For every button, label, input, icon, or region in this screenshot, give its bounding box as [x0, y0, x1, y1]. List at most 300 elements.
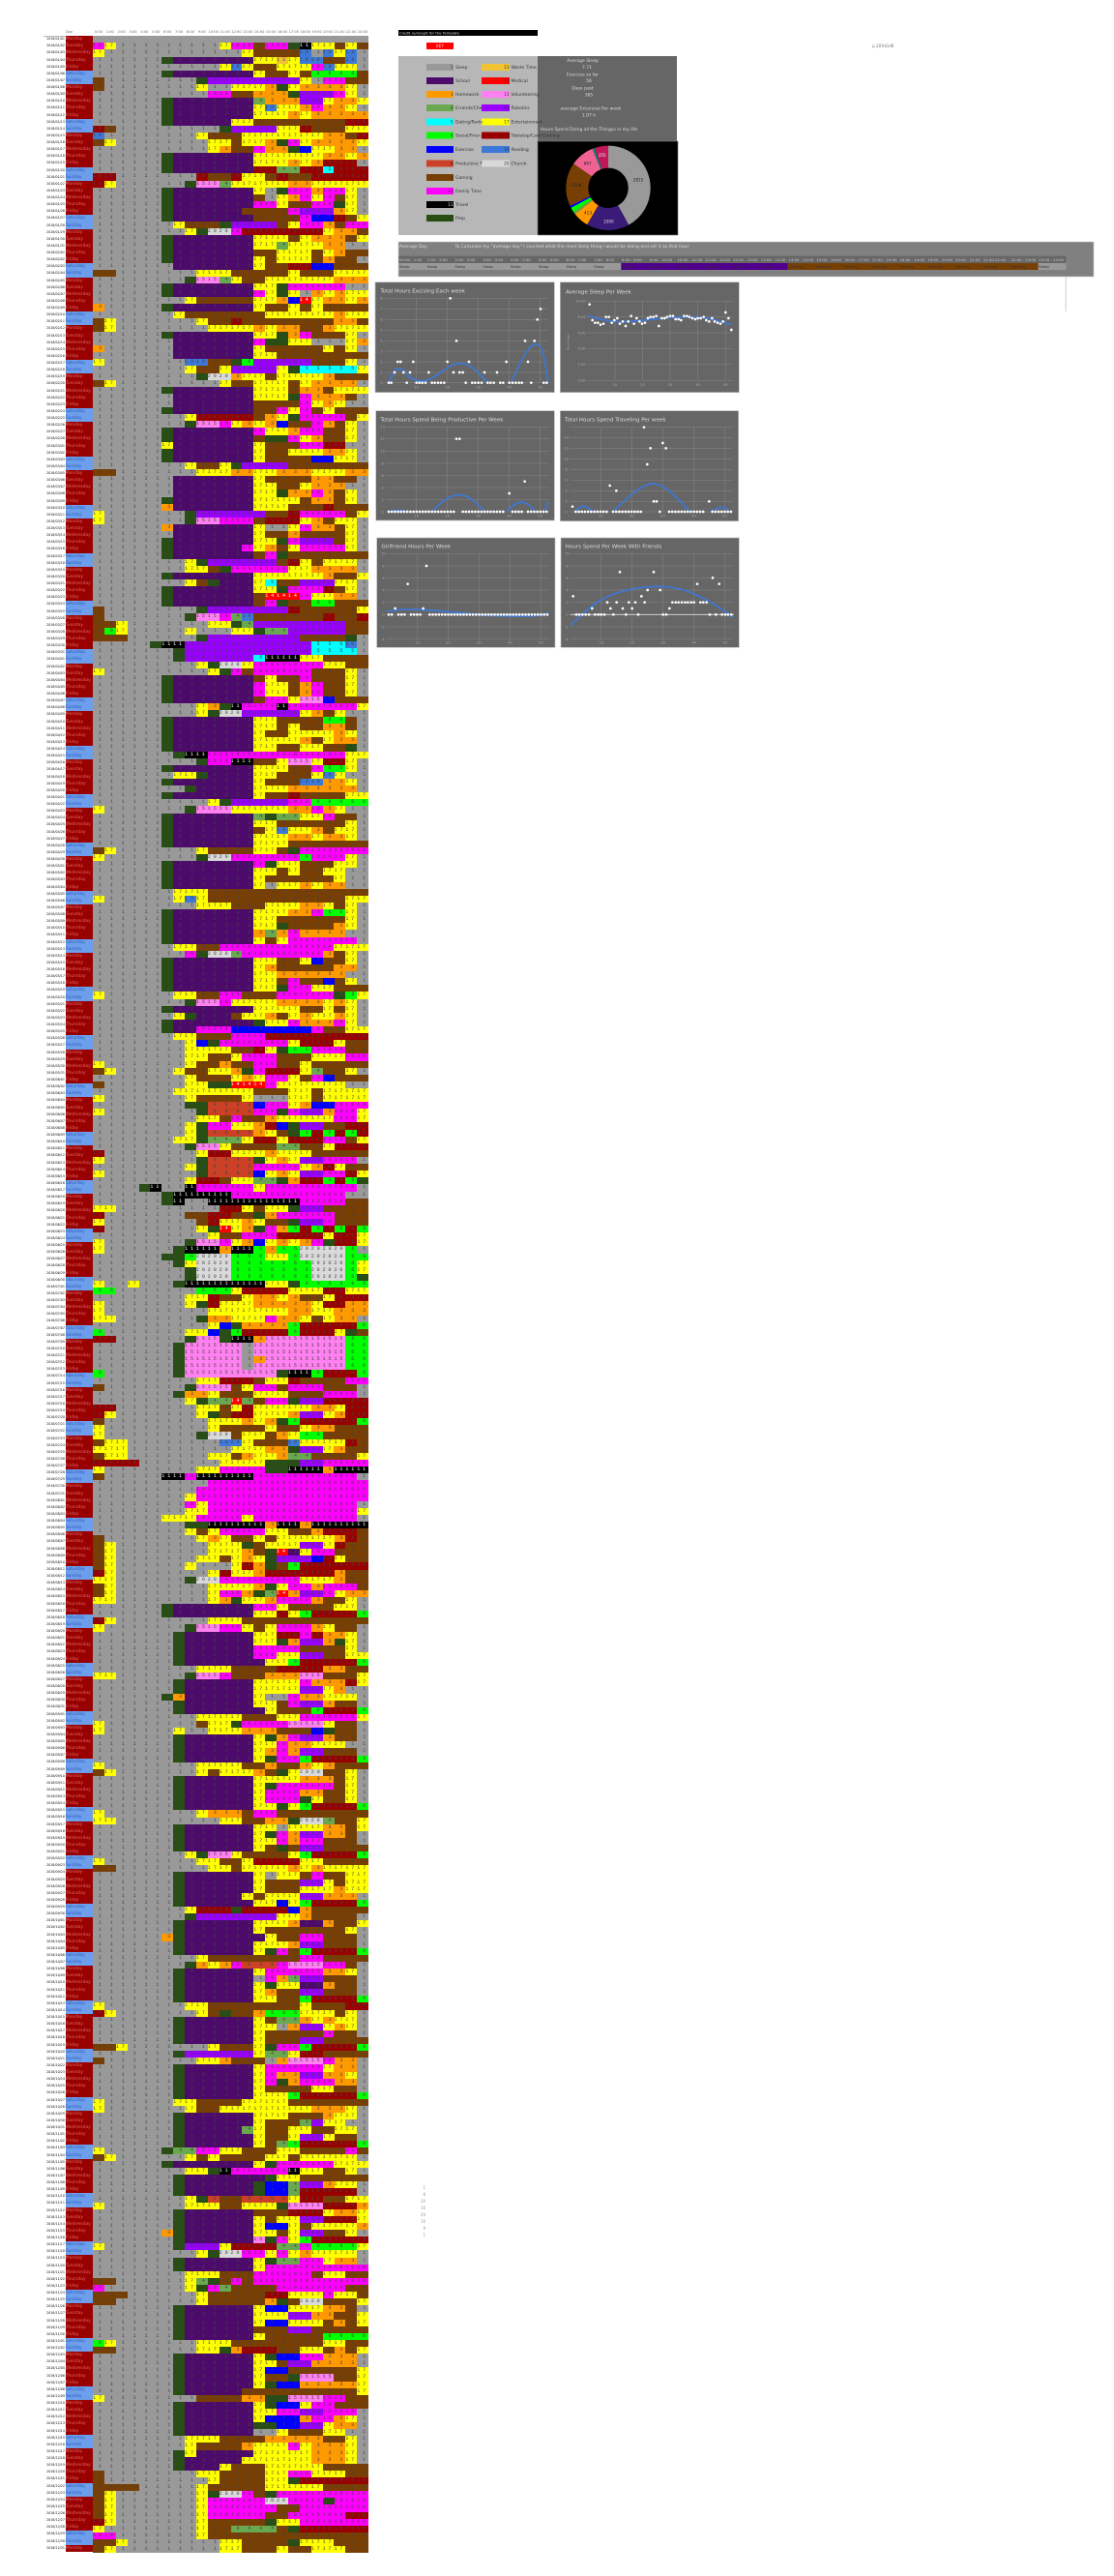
hourly activity grid: 365 days by 24 hours: 9: [282, 2526, 288, 2532]
hourly activity grid: 365 days by 24 hours: 10: [265, 1316, 277, 1321]
hourly activity grid: 365 days by 24 hours: 1 1 1 1 1 1 1: [99, 2320, 173, 2325]
text: 2018/01/31: [46, 244, 65, 248]
hourly activity grid: 365 days by 24 hours: 17: [345, 2443, 357, 2448]
hourly activity grid: 365 days by 24 hours: 1 1 1 1 1 1 1 1: [99, 1164, 185, 1170]
hourly activity grid: 365 days by 24 hours: 17: [231, 1226, 242, 1231]
text: 2018/12/28: [46, 2525, 65, 2529]
hourly activity grid: 365 days by 24 hours: 9: [282, 559, 288, 565]
hourly activity grid: 365 days by 24 hours: 10101010: [300, 1199, 345, 1204]
hourly activity grid: 365 days by 24 hours: 3 3: [351, 469, 368, 475]
hourly activity grid: 365 days by 24 hours: 17: [323, 2134, 335, 2140]
hourly activity grid: 365 days by 24 hours: 1717171717171717: [220, 2106, 311, 2112]
hourly activity grid: 365 days by 24 hours: 7 7 7 7 7 7 7: [236, 1026, 311, 1032]
hourly activity grid: 365 days by 24 hours: 1 1 1 1 1 1 1 1: [122, 1542, 208, 1548]
hourly activity grid: 365 days by 24 hours: 17: [265, 1624, 277, 1630]
text: 2018/10/20: [46, 2050, 65, 2054]
hourly activity grid: 365 days by 24 hours: 7: [259, 1170, 265, 1176]
hourly activity grid: 365 days by 24 hours: 17: [345, 421, 357, 427]
text: 2018/04/20: [46, 788, 65, 792]
legend numbers: 13: [504, 65, 510, 70]
hourly activity grid: 365 days by 24 hours: 17: [253, 875, 265, 881]
hourly activity grid: 365 days by 24 hours: 10101010: [323, 1460, 368, 1466]
hourly activity grid: 365 days by 24 hours: 12: [185, 806, 196, 812]
hourly activity grid: 365 days by 24 hours: 17: [185, 228, 196, 234]
hourly activity grid: 365 days by 24 hours: 1717171717: [277, 1535, 335, 1541]
hourly activity grid: 365 days by 24 hours: 17: [345, 545, 357, 550]
text: 2018/10/03: [46, 1933, 65, 1937]
text: 2018/01/14: [46, 127, 65, 131]
hourly activity grid: 365 days by 24 hours: 10: [265, 600, 277, 606]
hourly activity grid: 365 days by 24 hours: 1 1 1 1 1 1 1 1: [99, 1192, 368, 1198]
hourly activity grid: 365 days by 24 hours: 9: [351, 511, 357, 517]
hourly activity grid: 365 days by 24 hours: 9 9: [351, 1164, 368, 1170]
hourly activity grid: 365 days by 24 hours: 1717: [253, 724, 277, 729]
average day hour labels: 20:00 - 21:00: [955, 257, 981, 262]
hourly activity grid: 365 days by 24 hours: 1 1 1 1 1 1 1 1: [99, 1645, 368, 1651]
hourly activity grid: 365 days by 24 hours: 17: [104, 1411, 116, 1417]
average day activities: Gaming: [955, 264, 970, 269]
hourly activity grid: 365 days by 24 hours: 12: [161, 250, 173, 255]
hourly activity grid: 365 days by 24 hours: 17: [253, 2333, 265, 2339]
hourly activity grid: 365 days by 24 hours: 12: [173, 2457, 185, 2463]
chart: total hours exercising each week: 20: [445, 385, 451, 389]
text: 2018/02/05: [46, 279, 65, 282]
hourly activity grid: 365 days by 24 hours: 2 2 2 2 2 2: [191, 1694, 253, 1700]
hourly activity grid: 365 days by 24 hours: 12: [288, 91, 300, 97]
hourly activity grid: 365 days by 24 hours: 9: [259, 1205, 265, 1211]
text: 2018/06/02: [46, 1084, 65, 1088]
text: 2018/08/05: [46, 1525, 65, 1529]
hourly activity grid: 365 days by 24 hours: 1 1 1 1 1 1 1 1 1: [99, 1501, 368, 1507]
hourly activity grid: 365 days by 24 hours: 9 9 9 9: [214, 847, 253, 853]
hourly activity grid: 365 days by 24 hours: 12: [196, 1851, 208, 1857]
hourly activity grid: 365 days by 24 hours: 2 2 2 2 2 2 2: [179, 875, 253, 881]
text: 2018/09/21: [46, 1850, 65, 1853]
hourly activity grid: 365 days by 24 hours: 151515: [196, 1384, 231, 1390]
hourly activity grid: 365 days by 24 hours: 171717: [300, 1577, 334, 1583]
text: 2018/02/14: [46, 341, 65, 344]
hourly activity grid: 365 days by 24 hours: 10: [345, 2147, 357, 2153]
text: 2018/10/08: [46, 1967, 65, 1970]
hourly activity grid: 365 days by 24 hours: 12: [173, 2360, 185, 2366]
hourly activity grid: 365 days by 24 hours: 18: [93, 1411, 104, 1417]
hourly activity grid: 365 days by 24 hours: 9: [236, 139, 242, 145]
hourly activity grid: 365 days by 24 hours: 12: [265, 1549, 277, 1554]
hourly activity grid: 365 days by 24 hours: 2 2 2 2 2 2: [191, 2367, 253, 2373]
hourly activity grid: 365 days by 24 hours: 10101010101010: [220, 1577, 300, 1583]
chart: average sleep per week: 8.00: [578, 315, 586, 319]
hourly activity grid: 365 days by 24 hours: 9: [351, 2305, 357, 2311]
text: 2018/12/26: [46, 2511, 65, 2515]
hourly activity grid: 365 days by 24 hours: 1 1 1 1 1 1 1: [99, 256, 368, 262]
text: 2018/03/11: [46, 513, 65, 517]
hourly activity grid: 365 days by 24 hours: 12: [173, 1996, 185, 2001]
hourly activity grid: 365 days by 24 hours: 1717: [208, 1865, 231, 1871]
hourly activity grid: 365 days by 24 hours: 18: [345, 1226, 357, 1231]
hourly activity grid: 365 days by 24 hours: 17171717: [311, 2250, 357, 2256]
hourly activity grid: 365 days by 24 hours: 10: [300, 400, 311, 406]
hourly activity grid: 365 days by 24 hours: 1 1 1 1 1 1 1 1: [99, 2258, 368, 2264]
hourly activity grid: 365 days by 24 hours: 1 1 1 1 1 1 1 1 1: [99, 579, 368, 585]
hourly activity grid: 365 days by 24 hours: 17: [357, 2298, 368, 2304]
hourly activity grid: 365 days by 24 hours: 2 2 2 2 2 2 2: [179, 394, 253, 400]
text: 2018/08/30: [46, 1698, 65, 1702]
hourly activity grid: 365 days by 24 hours: 1616161616161616161616: [185, 648, 311, 654]
hourly activity grid: 365 days by 24 hours: 17: [345, 1783, 357, 1789]
hourly activity grid: 365 days by 24 hours: 12: [185, 785, 196, 791]
hourly activity grid: 365 days by 24 hours: 171717: [277, 1150, 311, 1156]
text: 2018/08/13: [46, 1581, 65, 1584]
hourly activity grid: 365 days by 24 hours: 17: [300, 1068, 311, 1074]
hourly activity grid: 365 days by 24 hours: 17: [253, 2072, 265, 2078]
hourly activity grid: 365 days by 24 hours: 9: [99, 2058, 104, 2063]
legend numbers: 10: [448, 189, 454, 193]
hourly activity grid: 365 days by 24 hours: 18: [93, 2519, 104, 2525]
hourly activity grid: 365 days by 24 hours: 6: [306, 854, 311, 860]
hourly activity grid: 365 days by 24 hours: 17: [253, 1886, 265, 1892]
hourly activity grid: 365 days by 24 hours: 1 1 1 1 1 1 1 1: [99, 1982, 368, 1988]
hourly activity grid: 365 days by 24 hours: 12: [161, 882, 173, 888]
hourly activity grid: 365 days by 24 hours: 14: [220, 1226, 231, 1231]
hourly activity grid: 365 days by 24 hours: 161616: [277, 1555, 311, 1561]
hourly activity grid: 365 days by 24 hours: 10: [253, 290, 265, 296]
hourly activity grid: 365 days by 24 hours: 9 9 9: [339, 1219, 368, 1225]
hourly activity grid: 365 days by 24 hours: 171717: [311, 1053, 345, 1059]
hourly activity grid: 365 days by 24 hours: 171717: [253, 1391, 288, 1397]
text: 2018/09/24: [46, 1870, 65, 1874]
hourly activity grid: 365 days by 24 hours: 1 1 1 1 1 1 1: [99, 2230, 368, 2235]
hourly activity grid: 365 days by 24 hours: 3 3 3: [317, 2450, 345, 2456]
hourly activity grid: 365 days by 24 hours: 1010: [323, 1137, 345, 1142]
hourly activity grid: 365 days by 24 hours: 10: [300, 194, 311, 200]
hourly activity grid: 365 days by 24 hours: 3 3: [271, 1446, 288, 1452]
hourly activity grid: 365 days by 24 hours: 9: [317, 559, 323, 565]
hourly activity grid: 365 days by 24 hours: 17: [93, 1170, 104, 1176]
hourly activity grid: 365 days by 24 hours: 1 1 1 1 1 1 1: [133, 635, 368, 640]
hourly activity grid: 365 days by 24 hours: 9: [339, 586, 345, 592]
hourly activity grid: 365 days by 24 hours: 1717: [277, 1913, 300, 1919]
header row of the time grid: 14:00: [254, 30, 264, 34]
hourly activity grid: 365 days by 24 hours: 2020: [300, 1769, 323, 1775]
hourly activity grid: 365 days by 24 hours: 1 1 1 1 1 1 1: [99, 497, 368, 503]
hourly activity grid: 365 days by 24 hours: 17: [311, 882, 323, 888]
hourly activity grid: 365 days by 24 hours: 17: [288, 1075, 300, 1081]
hourly activity grid: 365 days by 24 hours: 10101010: [253, 1645, 300, 1651]
hourly activity grid: 365 days by 24 hours: 9 9: [329, 1796, 345, 1802]
hourly activity grid: 365 days by 24 hours: 1 1 1 1 1 1 1 1: [110, 1150, 196, 1156]
legend numbers: 9: [451, 175, 454, 180]
hourly activity grid: 365 days by 24 hours: 17: [311, 1796, 323, 1802]
hourly activity grid: 365 days by 24 hours: 17: [323, 1006, 334, 1012]
hourly activity grid: 365 days by 24 hours: 12: [173, 1975, 185, 1981]
hourly activity grid: 365 days by 24 hours: 3: [259, 2010, 265, 2016]
hourly activity grid: 365 days by 24 hours: 18: [93, 1150, 104, 1156]
hourly activity grid: 365 days by 24 hours: 3 3 3 3 3 3: [282, 971, 345, 977]
hourly activity grid: 365 days by 24 hours: 1 1 1 1 1 1 1 1: [99, 1013, 368, 1019]
hourly activity grid: 365 days by 24 hours: 3: [248, 1226, 253, 1231]
hourly activity grid: 365 days by 24 hours: 12: [277, 283, 288, 289]
hourly activity grid: 365 days by 24 hours: 1212: [161, 1254, 185, 1259]
hourly activity grid: 365 days by 24 hours: 1616: [300, 2037, 323, 2043]
hourly activity grid: 365 days by 24 hours: 1 1 1 1 1 1 1: [99, 779, 368, 785]
hourly activity grid: 365 days by 24 hours: 10: [300, 215, 311, 221]
hourly activity grid: 365 days by 24 hours: 1 1 1 1 1 1 1: [99, 724, 368, 729]
hourly activity grid: 365 days by 24 hours: 17: [265, 325, 277, 331]
legend numbers: 4: [451, 105, 454, 110]
text: 2018/03/03: [46, 458, 65, 461]
hourly activity grid: 365 days by 24 hours: 3: [282, 1239, 288, 1245]
panel: summary stats: average Excersise Per week: [561, 106, 622, 112]
hourly activity grid: 365 days by 24 hours: 1 1 1 1 1 1 1 1: [99, 1639, 368, 1644]
hourly activity grid: 365 days by 24 hours: 101010101010101010101010: [208, 752, 345, 757]
chart: total hours traveling per week: 10: [564, 458, 570, 461]
hourly activity grid: 365 days by 24 hours: 17: [253, 2367, 265, 2373]
text: 2018/05/30: [46, 1064, 65, 1068]
hourly activity grid: 365 days by 24 hours: 181818181818: [265, 1570, 335, 1576]
hourly activity grid: 365 days by 24 hours: 12: [335, 1639, 345, 1644]
hourly activity grid: 365 days by 24 hours: 1 1 1 1 1 1 1: [99, 1659, 173, 1665]
hourly activity grid: 365 days by 24 hours: 3 3: [339, 2209, 357, 2215]
hourly activity grid: 365 days by 24 hours: 12: [161, 717, 173, 723]
legend labels: Social/Frien: [455, 133, 481, 139]
hourly activity grid: 365 days by 24 hours: 12: [173, 1886, 185, 1892]
hourly activity grid: 365 days by 24 hours: 9 9 9: [225, 2271, 253, 2277]
hourly activity grid: 365 days by 24 hours: 12: [265, 1734, 277, 1740]
hourly activity grid: 365 days by 24 hours: 18181818: [311, 1803, 357, 1809]
hourly activity grid: 365 days by 24 hours: 17: [185, 2278, 196, 2284]
hourly activity grid: 365 days by 24 hours: 17: [345, 208, 357, 214]
date and weekday columns: Saturday Sunday: [66, 1567, 85, 1579]
hourly activity grid: 365 days by 24 hours: 1010: [196, 2147, 220, 2153]
hourly activity grid: 365 days by 24 hours: 1 1 1 1 1 1: [122, 1577, 185, 1583]
hourly activity grid: 365 days by 24 hours: 1 1 1 1 1 1 1 1 1: [122, 43, 220, 48]
text: 2018/03/09: [46, 499, 65, 503]
hourly activity grid: 365 days by 24 hours: 1717: [345, 2196, 368, 2202]
hourly activity grid: 365 days by 24 hours: 9 9: [202, 944, 220, 950]
hourly activity grid: 365 days by 24 hours: 17: [253, 937, 265, 943]
hourly activity grid: 365 days by 24 hours: 3: [271, 964, 277, 970]
hourly activity grid: 365 days by 24 hours: 3: [225, 1597, 231, 1603]
hourly activity grid: 365 days by 24 hours: 171717: [288, 1824, 323, 1830]
hourly activity grid: 365 days by 24 hours: 9 9 9: [306, 270, 334, 276]
hourly activity grid: 365 days by 24 hours: 1 1 1 1 1 1 1: [99, 352, 173, 358]
hourly activity grid: 365 days by 24 hours: 17: [288, 1851, 300, 1857]
chart: girlfriend hours per week: Girlfriend Hours Per Week: [381, 545, 452, 550]
chart: total hours exercising each week: 8: [380, 297, 383, 301]
text: 2018/05/27: [46, 1043, 65, 1047]
hourly activity grid: 365 days by 24 hours: 17: [335, 710, 345, 716]
hourly activity grid: 365 days by 24 hours: 3: [294, 1748, 300, 1754]
hourly activity grid: 365 days by 24 hours: 9 9 9: [339, 985, 368, 991]
hourly activity grid: 365 days by 24 hours: 12: [277, 1769, 288, 1775]
hourly activity grid: 365 days by 24 hours: 181818: [334, 166, 368, 172]
hourly activity grid: 365 days by 24 hours: 17: [208, 1232, 220, 1238]
hourly activity grid: 365 days by 24 hours: 2 2 2 2 2 2: [191, 2030, 253, 2036]
hourly activity grid: 365 days by 24 hours: 12: [161, 875, 173, 881]
hourly activity grid: 365 days by 24 hours: 17171717: [208, 1584, 253, 1589]
hourly activity grid: 365 days by 24 hours: 1212: [208, 1081, 231, 1087]
hourly activity grid: 365 days by 24 hours: 6: [294, 1418, 300, 1424]
hourly activity grid: 365 days by 24 hours: 1010: [323, 1962, 345, 1968]
hourly activity grid: 365 days by 24 hours: 2020: [208, 1432, 231, 1437]
hourly activity grid: 365 days by 24 hours: 1717: [231, 1570, 253, 1576]
hourly activity grid: 365 days by 24 hours: 1 1 1 1 1 1 1 1: [99, 1267, 185, 1273]
hourly activity grid: 365 days by 24 hours: 10: [300, 394, 311, 400]
hourly activity grid: 365 days by 24 hours: 101010: [277, 1597, 311, 1603]
hourly activity grid: 365 days by 24 hours: 3: [282, 1975, 288, 1981]
hourly activity grid: 365 days by 24 hours: 17: [208, 668, 220, 674]
text: 2018/07/12: [46, 1360, 65, 1364]
text: 2018/09/14: [46, 1801, 65, 1805]
hourly activity grid: 365 days by 24 hours: 9 9: [236, 1047, 253, 1052]
hourly activity grid: 365 days by 24 hours: 17: [185, 1122, 196, 1128]
hourly activity grid: 365 days by 24 hours: 17: [253, 1790, 265, 1795]
hourly activity grid: 365 days by 24 hours: 9 9 9 9 9 9: [282, 916, 345, 922]
hourly activity grid: 365 days by 24 hours: 2 2 2 2 2 2: [191, 2312, 253, 2318]
hourly activity grid: 365 days by 24 hours: 12: [173, 2464, 185, 2470]
hourly activity grid: 365 days by 24 hours: 10: [323, 1590, 335, 1596]
hourly activity grid: 365 days by 24 hours: 17171717: [208, 325, 253, 331]
hourly activity grid: 365 days by 24 hours: 9: [271, 1845, 277, 1851]
hourly activity grid: 365 days by 24 hours: 2 2 2 2 2 2: [191, 1831, 253, 1837]
hourly activity grid: 365 days by 24 hours: 171717: [300, 1886, 334, 1892]
hourly activity grid: 365 days by 24 hours: 10: [277, 2236, 288, 2242]
hourly activity grid: 365 days by 24 hours: 9 9: [339, 1734, 357, 1740]
hourly activity grid: 365 days by 24 hours: 17: [288, 524, 300, 530]
hourly activity grid: 365 days by 24 hours: 1717: [345, 792, 368, 798]
hourly activity grid: 365 days by 24 hours: 9: [282, 868, 288, 873]
hourly activity grid: 365 days by 24 hours: 17: [253, 792, 265, 798]
hourly activity grid: 365 days by 24 hours: 1818: [345, 2002, 368, 2008]
hourly activity grid: 365 days by 24 hours: 9 9: [351, 1199, 368, 1204]
hourly activity grid: 365 days by 24 hours: 1717: [323, 2271, 345, 2277]
hourly activity grid: 365 days by 24 hours: 1717: [265, 1254, 288, 1259]
hourly activity grid: 365 days by 24 hours: 12: [196, 635, 208, 640]
hourly activity grid: 365 days by 24 hours: 9 9: [271, 531, 288, 537]
chart: average sleep per week: Average Sleep Per Week: [566, 289, 632, 295]
hourly activity grid: 365 days by 24 hours: 2 2 2 2 2 2: [191, 1756, 253, 1762]
hourly activity grid: 365 days by 24 hours: 1 1 1 1 1 1: [99, 841, 161, 846]
hourly activity grid: 365 days by 24 hours: 2 2 2 2 2 2: [191, 2236, 253, 2242]
hourly activity grid: 365 days by 24 hours: 1 1 1 1 1 1 1: [110, 2203, 185, 2208]
hourly activity grid: 365 days by 24 hours: 9: [329, 2320, 334, 2325]
hourly activity grid: 365 days by 24 hours: 12: [173, 2409, 185, 2414]
hourly activity grid: 365 days by 24 hours: 9 9 9: [317, 675, 345, 681]
hourly activity grid: 365 days by 24 hours: 12: [196, 2285, 208, 2291]
hourly activity grid: 365 days by 24 hours: 6 6 6 6 6 6: [306, 1281, 368, 1287]
hourly activity grid: 365 days by 24 hours: 1111111111: [311, 1522, 368, 1527]
hourly activity grid: 365 days by 24 hours: 1 1 1 1 1 1 1 1: [99, 394, 368, 400]
hourly activity grid: 365 days by 24 hours: 12: [161, 675, 173, 681]
average day hour labels: 3:00 - 4:00: [483, 257, 504, 262]
hourly activity grid: 365 days by 24 hours: 9 9 9 9: [329, 1858, 368, 1864]
hourly activity grid: 365 days by 24 hours: 17: [208, 146, 220, 152]
hourly activity grid: 365 days by 24 hours: 9: [202, 579, 208, 585]
hourly activity grid: 365 days by 24 hours: 4: [202, 2278, 208, 2284]
hourly activity grid: 365 days by 24 hours: 1818: [93, 1336, 116, 1342]
hourly activity grid: 365 days by 24 hours: 3 3 3: [317, 235, 345, 241]
hourly activity grid: 365 days by 24 hours: 12: [231, 359, 242, 365]
hourly activity grid: 365 days by 24 hours: 10: [323, 2030, 334, 2036]
hourly activity grid: 365 days by 24 hours: 12: [265, 1562, 277, 1568]
hourly activity grid: 365 days by 24 hours: 9 9 9 9: [248, 208, 288, 214]
text: 2018/12/20: [46, 2470, 65, 2473]
hourly activity grid: 365 days by 24 hours: 1717: [185, 2002, 208, 2008]
average day hour labels: 8:00 - 9:00: [622, 257, 642, 262]
hourly activity grid: 365 days by 24 hours: 17: [277, 1584, 288, 1589]
hourly activity grid: 365 days by 24 hours: 9 9 9 9 9 9 9 9: [282, 1810, 368, 1816]
hourly activity grid: 365 days by 24 hours: 8 8 8 8: [214, 1164, 253, 1170]
hourly activity grid: 365 days by 24 hours: 17: [196, 2512, 208, 2518]
hourly activity grid: 365 days by 24 hours: 17: [185, 1095, 196, 1101]
hourly activity grid: 365 days by 24 hours: 1 1 1 1 1 1 1 1: [110, 1535, 196, 1541]
hourly activity grid: 365 days by 24 hours: 6: [306, 1851, 311, 1857]
hourly activity grid: 365 days by 24 hours: 17: [253, 256, 265, 262]
hourly activity grid: 365 days by 24 hours: 171717: [265, 903, 300, 908]
average day hour labels: 15:00 - 16:00: [816, 257, 842, 262]
chart: total hours productive per week: 20: [445, 514, 451, 518]
hourly activity grid: 365 days by 24 hours: 1717: [220, 2546, 242, 2552]
hourly activity grid: 365 days by 24 hours: 3 3: [339, 146, 357, 152]
hourly activity grid: 365 days by 24 hours: 3: [306, 1239, 311, 1245]
hourly activity grid: 365 days by 24 hours: 12: [208, 710, 220, 716]
date and weekday columns: Saturday Sunday: [66, 2484, 85, 2496]
hourly activity grid: 365 days by 24 hours: 17: [345, 675, 357, 681]
hourly activity grid: 365 days by 24 hours: 1 1 1 1 1 1 1 1: [99, 489, 368, 495]
hourly activity grid: 365 days by 24 hours: 9 9: [339, 1728, 357, 1733]
hourly activity grid: 365 days by 24 hours: 12: [265, 814, 277, 819]
hourly activity grid: 365 days by 24 hours: 9: [339, 524, 345, 530]
hourly activity grid: 365 days by 24 hours: 17: [253, 2141, 265, 2147]
hourly activity grid: 365 days by 24 hours: 12: [173, 2209, 185, 2215]
hourly activity grid: 365 days by 24 hours: 12: [161, 696, 173, 702]
text: 2018/02/22: [46, 396, 65, 400]
hourly activity grid: 365 days by 24 hours: 151515: [288, 2058, 323, 2063]
hourly activity grid: 365 days by 24 hours: 12: [253, 628, 265, 634]
text: 2018/04/13: [46, 740, 65, 744]
hourly activity grid: 365 days by 24 hours: 20202020: [300, 1254, 345, 1259]
hourly activity grid: 365 days by 24 hours: 1717: [208, 1721, 231, 1727]
hourly activity grid: 365 days by 24 hours: 12: [334, 201, 345, 207]
hourly activity grid: 365 days by 24 hours: 171717: [335, 325, 368, 331]
hourly activity grid: 365 days by 24 hours: 10: [242, 545, 253, 550]
hourly activity grid: 365 days by 24 hours: 9: [363, 1584, 368, 1589]
hourly activity grid: 365 days by 24 hours: 2 2 2 2 2 2: [191, 1686, 253, 1692]
hourly activity grid: 365 days by 24 hours: 101010: [323, 1157, 357, 1163]
hourly activity grid: 365 days by 24 hours: 9 9: [329, 428, 345, 433]
hourly activity grid: 365 days by 24 hours: 1717: [173, 992, 196, 997]
hourly activity grid: 365 days by 24 hours: 17: [253, 1734, 265, 1740]
chart: hours with friends per week: 2: [566, 601, 569, 605]
hourly activity grid: 365 days by 24 hours: 2 2 2 2 2 2 2: [179, 242, 253, 248]
hourly activity grid: 365 days by 24 hours: 3: [339, 208, 345, 214]
hourly activity grid: 365 days by 24 hours: 17: [185, 1260, 196, 1266]
hourly activity grid: 365 days by 24 hours: 3 3 3: [317, 394, 345, 400]
hourly activity grid: 365 days by 24 hours: 9: [339, 489, 345, 495]
hourly activity grid: 365 days by 24 hours: 12: [161, 1006, 173, 1012]
text: 2018/09/11: [46, 1781, 65, 1785]
hourly activity grid: 365 days by 24 hours: 1515: [196, 1673, 220, 1678]
average day activities: [399, 264, 1049, 269]
hourly activity grid: 365 days by 24 hours: 1 1 1 1 1 1 1 1: [122, 2010, 368, 2016]
hourly activity grid: 365 days by 24 hours: 10: [311, 909, 323, 915]
text: 2018/05/24: [46, 1022, 65, 1026]
hourly activity grid: 365 days by 24 hours: 9 9: [282, 675, 300, 681]
hourly activity grid: 365 days by 24 hours: 4 4: [282, 166, 300, 172]
hourly activity grid: 365 days by 24 hours: 9 9 9 9: [329, 2484, 368, 2490]
hourly activity grid: 365 days by 24 hours: 12: [161, 1026, 173, 1032]
header row of the time grid: 4:00: [140, 30, 148, 34]
